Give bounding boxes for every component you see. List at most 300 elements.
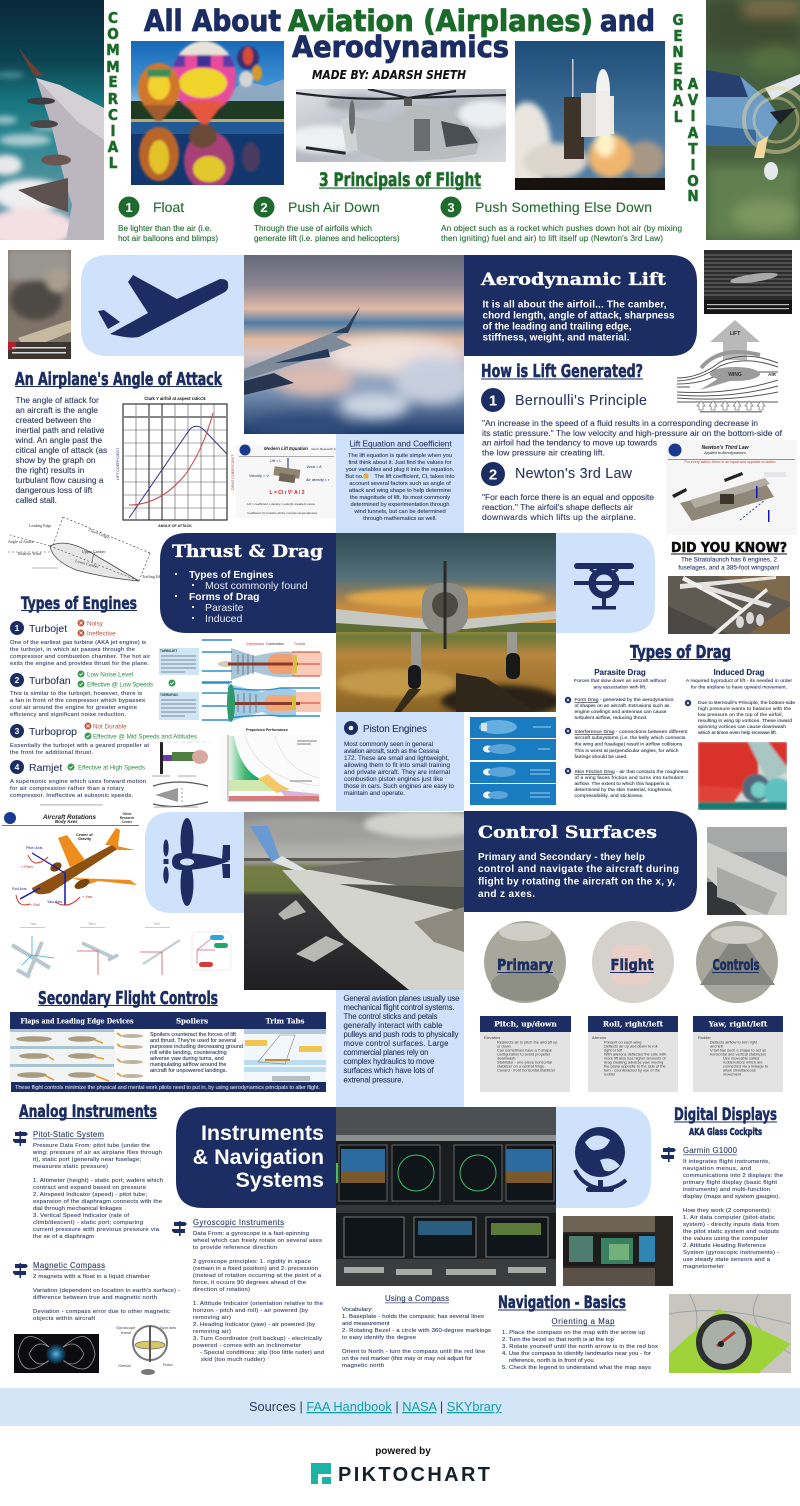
card: roll: With ailerons deflected the side with [604, 1052, 666, 1056]
card: roll: Roll, right/left [603, 1020, 664, 1028]
title [144, 4, 655, 64]
icon: airplane [98, 275, 228, 338]
principle 1: float: Be lighter than the air (i.e. [118, 224, 212, 233]
card: yaw: connected via a linkage to [723, 1064, 768, 1068]
sources bar [0, 1388, 800, 1426]
diagram: yaw pitch roll axes: Roll [154, 922, 160, 926]
panel body text: Primary and Secondary - they help [478, 852, 645, 863]
engine: turboprop [10, 722, 197, 756]
panel body text: through mathematics as well. [363, 516, 437, 522]
chart: lift and drag vs angle of attack: LIFT COEFFICIENT [116, 447, 120, 480]
panel body text: aviation aircraft, such as the Cessna [344, 748, 439, 755]
section: gyroscopic instruments: - Special conditions: slip (too little ruder) and [200, 1350, 324, 1356]
diagram: modern lift equation: Velocity = V [249, 474, 269, 478]
footer: powered by piktochart: PIKTOCHART [338, 1464, 490, 1486]
text: spoilers: Spoilers counteract the forces of lift [150, 1032, 236, 1038]
panel: instruments and navigation systems [176, 1107, 336, 1208]
text: spoilers: adverse yaw during turns, and [150, 1056, 224, 1062]
diagram: aircraft rotations: Body Axes [55, 819, 78, 824]
section: pitot-static system: contract and expand based on pressure [33, 1185, 147, 1191]
diagram: newton's third law applied to aerodynamics: Applied to Aerodynamics [703, 451, 746, 455]
table: secondary flight controls: Spoilers [176, 1016, 208, 1026]
footer: powered by piktochart [311, 1446, 490, 1486]
text: spoilers: and thrust. They're used for several [150, 1038, 236, 1044]
vertical label: commercial: E [108, 73, 118, 91]
section: garmin g1000: Garmin G1000 [683, 1146, 738, 1155]
column: parasite drag: of a wing faces friction and turns into turbulent [574, 775, 684, 781]
byline: MADE BY: ADARSH SHETH [312, 67, 466, 82]
section: pitot-static system: 2. Airspeed Indicator (speed) - pitot tube; [33, 1192, 147, 1198]
diagram: aircraft rotations: + Yaw [82, 895, 93, 899]
diagram: gyroscope: Gyroscope [116, 1325, 136, 1330]
engine: turbojet: exits the engine and provides thrust for the plane. [10, 661, 149, 667]
section: garmin g1000: communications into 2 displays: the [683, 1173, 784, 1179]
vertical label: commercial: M [106, 41, 120, 59]
column: induced drag: resulting in wing tip vortices. These inward [698, 718, 792, 724]
column: induced drag: Induced Drag [713, 668, 765, 677]
panel heading: & Navigation [193, 1145, 324, 1169]
diagram: modern lift equation: Lift = L [270, 459, 282, 463]
section: gyroscopic instruments: 2 gyroscope principles: 1. rigidity in space [193, 1259, 312, 1265]
control: primary: Primary [497, 956, 553, 974]
section: garmin g1000: System (gyroscopic instruments) - [683, 1250, 779, 1256]
vertical label: general aviation [672, 11, 699, 205]
diagram: newton's third law applied to aerodynamics: For every action, there is an equal and opposite re-action [685, 460, 775, 464]
photo: propeller plane on the tarmac [336, 533, 556, 712]
engine: turbojet [10, 620, 150, 667]
vertical label: commercial: I [110, 122, 116, 140]
engine: ramjet: for air compression rather than a rotary [10, 786, 124, 792]
section: using a compass: 2. Rotating Bezel - a circle with 360-degree markings [342, 1328, 491, 1334]
diagram: turbojet: TURBOJET [160, 649, 177, 653]
engine: turboprop: 3 [15, 726, 20, 736]
photo: space shuttle launch [515, 41, 665, 190]
section: bernoulli's principle: 1 [489, 392, 497, 410]
icon: signpost [13, 1131, 28, 1146]
engine: turbofan: Effective @ Low Speeds [87, 682, 153, 688]
text: angle of attack explanation: wind. An angle past the [14, 435, 102, 445]
section: garmin g1000: 2. Attitude Heading Reference [683, 1243, 767, 1249]
vertical label: general aviation: T [688, 140, 698, 158]
text: spoilers: manipulating airflow around the [150, 1062, 226, 1068]
section: newton's 3rd law [481, 462, 654, 522]
engine: turbofan: 2 [15, 675, 20, 685]
diagram: turbojet: Combustion [266, 642, 284, 646]
chart: lift and drag vs angle of attack: Clark Y airfoil at aspect ratio=6 [144, 396, 206, 401]
section: using a compass: Using a Compass [385, 1294, 449, 1303]
column: parasite drag: compressibility, and stickiness. [574, 793, 644, 799]
section: orienting a map [502, 1317, 658, 1371]
section: gyroscopic instruments: to provide reference direction [193, 1245, 277, 1251]
heading: navigation basics: Navigation - Basics [498, 1293, 626, 1313]
principle 3: push something else down: then igniting) fuel and air) to lift itself up (Newton's 3rd Law) [441, 234, 663, 243]
text: angle of attack explanation: the right) results in [16, 465, 85, 475]
vertical label: general aviation: R [673, 76, 684, 94]
icon: plane front view [574, 563, 634, 610]
heading: digital displays [674, 1105, 777, 1138]
panel bullet list: Parasite [205, 602, 244, 614]
section: magnetic compass: objects within aircraft [33, 1316, 95, 1322]
diagram: trim tabs [244, 1029, 326, 1082]
column: parasite drag: turbulent airflow, reducing thrust. [574, 715, 648, 721]
control: controls: Controls [712, 956, 760, 974]
diagram: how a wing creates lift: LIFT [730, 331, 740, 337]
text: angle of attack explanation: dangerous loss of lift [16, 485, 93, 495]
card: yaw: horizontal and vertical stabilizers [710, 1052, 766, 1056]
section: magnetic compass [13, 1261, 180, 1322]
diagram: yaw pitch roll axes [12, 922, 231, 977]
panel: lift equation and coefficient [336, 434, 464, 533]
engine: turboprop: Turboprop [29, 726, 77, 738]
panel bullet list: Types of Engines [189, 570, 274, 581]
principle 1: float: hot air balloons and blimps) [118, 234, 218, 243]
section: gyroscopic instruments: horizon - pitch and roll) - air powered (by [193, 1308, 308, 1314]
card: yaw: Deflects airflow to turn right [710, 1040, 758, 1044]
card: yaw: Yaw, right/left [708, 1020, 768, 1028]
chart: lift and drag vs angle of attack [116, 396, 235, 528]
diagram: turbojet: Turbine [294, 642, 305, 646]
panel: globe icon [556, 1107, 651, 1208]
section: gyroscopic instruments: (remain in a fixed position) and 2. precession [193, 1266, 318, 1272]
card: yaw: ruddervators which are [723, 1060, 763, 1064]
icon: plane top view [163, 818, 230, 906]
panel body text: The lift equation is quite simple when you [348, 453, 452, 459]
diagram: gyroscope: Gimbal [118, 1363, 131, 1368]
icon: signpost [172, 1221, 187, 1236]
column: parasite drag: any association with lift. [594, 684, 646, 690]
panel heading: Instruments [201, 1121, 324, 1145]
section: gyroscopic instruments: Data From: a gyroscope is a fast-spinning [193, 1231, 309, 1237]
control: primary [484, 921, 566, 1003]
chart: propulsion performance [220, 728, 320, 801]
section: garmin g1000: 1. Air data computer (pitot-static [683, 1215, 775, 1221]
icon: piston engine [344, 721, 358, 735]
panel heading: Thrust & Drag [172, 542, 323, 562]
section: using a compass: magnetic north [342, 1363, 384, 1369]
vertical label: commercial: M [106, 58, 120, 76]
diagram: modern lift equation: L = Cl r V² A / 2 [270, 490, 305, 496]
section: magnetic compass: difference between true and magnetic north [33, 1295, 157, 1301]
section: bernoulli's principle: an airfoil had the tendancy to move up towards [482, 438, 657, 448]
panel: control surfaces [464, 811, 697, 912]
sources bar: Sources | FAA Handbook | NASA | SKYbrary [249, 1399, 502, 1414]
panel body text: It is all about the airfoil... The camber, [482, 300, 667, 310]
card: pitch: Can sometimes have a T-shape [497, 1048, 552, 1052]
panel: airplane icon [81, 255, 244, 356]
section: garmin g1000: the values using the computer [683, 1236, 768, 1242]
photo: wing close-up [8, 250, 71, 359]
column: parasite drag: Form Drag - generated by the aerodynamics [574, 697, 674, 703]
text: angle of attack explanation: called stall. [16, 495, 57, 505]
heading: did you know: DID YOU KNOW? [671, 541, 787, 556]
section: gyroscopic instruments: direction of rotation) [193, 1287, 250, 1293]
principle 1: float: Float [153, 199, 184, 215]
vertical label: general aviation: V [688, 91, 699, 109]
card: yaw: and left [710, 1044, 724, 1048]
section: garmin g1000: display (maps and system gauges). [683, 1194, 780, 1200]
panel body text: chord length, angle of attack, sharpness [482, 310, 675, 322]
vertical label: commercial [106, 9, 120, 172]
principle 2: push air down: Through the use of airfoils which [254, 224, 372, 233]
section: orienting a map: 5. Check the legend to understand what the map says [502, 1365, 651, 1371]
panel: plane top view icon [145, 812, 244, 913]
section: gyroscopic instruments: Gyroscopic Instruments [193, 1218, 284, 1227]
text: spoilers: roll while landing, counteracting [150, 1050, 227, 1056]
photo: airfoil in wind tunnel [704, 250, 792, 314]
engine: turboprop: Not Durable [93, 724, 127, 730]
panel body text: move control surfaces. Large [344, 1039, 448, 1048]
diagram: modern lift equation: Area = A [307, 465, 322, 469]
panel body text: commercial planes rely on [344, 1048, 428, 1057]
vertical label: general aviation: L [674, 108, 683, 126]
engine: turbofan: efficiency and significant noise reduction. [10, 712, 126, 718]
text: stratolaunch fact: fuselages, and a 385-foot wingspan! [678, 564, 780, 572]
section: using a compass [342, 1294, 491, 1369]
card: roll: Deflects air up and down to roll [604, 1044, 658, 1048]
diagram: aircraft rotations: Glenn [122, 812, 132, 816]
principle 3: push something else down: An object such as a rocket which pushes down hot air (by mixing [441, 224, 682, 233]
vertical label: general aviation: O [687, 172, 699, 190]
section: gyroscopic instruments: removing air) [193, 1315, 231, 1321]
section: garmin g1000: navigation menus, and [683, 1166, 751, 1172]
principle 2: push air down [254, 196, 400, 243]
section: gyroscopic instruments [172, 1218, 324, 1363]
column: parasite drag: Parasite Drag [594, 668, 646, 677]
column: parasite drag: fairings should be used. [574, 754, 628, 760]
section: pitot-static system: current pressure with previous pressure via [33, 1227, 160, 1233]
section: garmin g1000: How they work (2 components): [683, 1208, 771, 1214]
column: induced drag: A required byproduct of lift - its needed in order [686, 678, 792, 684]
card: pitch: Redirects air to pitch the aircraft up [497, 1040, 557, 1044]
section: orienting a map: reference, north is in front of you [509, 1358, 594, 1364]
section: gyroscopic instruments: skid (too much rudder) [201, 1357, 265, 1363]
engine: turbofan: Turbofan [29, 675, 71, 687]
vertical label: general aviation: A [688, 75, 699, 93]
card: roll: more lift also has higher amounts of [604, 1056, 667, 1060]
column: induced drag: Due to Bernoulli's Principle, the bottom-side [698, 700, 795, 706]
diagram: newton's third law applied to aerodynamics [666, 440, 797, 535]
engine: ramjet: Effective at High Speeds [78, 764, 145, 772]
card: roll: rudder [604, 1072, 616, 1076]
section: bernoulli's principle: the low pressure air creating lift. [482, 448, 605, 458]
vertical label: general aviation: E [673, 27, 683, 45]
heading: analog instruments: Analog Instruments [19, 1102, 157, 1122]
engine: ramjet: Ramjet [29, 762, 62, 774]
vertical label: general aviation: G [672, 11, 684, 29]
card: yaw: Use moveable called [723, 1056, 759, 1060]
icon: piktochart logo [311, 1463, 331, 1484]
section: garmin g1000: the pitot static system and outputs [683, 1229, 779, 1235]
panel bullet list: Forms of Drag [189, 592, 259, 603]
section: gyroscopic instruments: 2. Heading Indicator (yaw) - air powered (by [193, 1322, 315, 1328]
principle 3: push something else down: Push Something Else Down [475, 199, 652, 215]
column: induced drag: spinning vortices can cause downwash [698, 724, 786, 730]
card: roll: drag creating adverse yaw moving [604, 1060, 663, 1064]
diagram: streamlined flow shapes [470, 717, 556, 805]
section: gyroscopic instruments: 1. Attitude Indicator (orientation relative to the [193, 1301, 324, 1307]
section: gyroscopic instruments: force, it occurs 90 degrees ahead of the [193, 1280, 307, 1286]
diagram: airfoil anatomy: Lower Camber [75, 558, 100, 569]
card: pitch: Canard - front horizontal stabilizer [497, 1068, 556, 1072]
section: pitot-static system: 3. Vertical Speed Indicator (rate of [33, 1213, 129, 1219]
section: magnetic compass: Deviation - compass error due to other magnetic [33, 1309, 170, 1315]
icon: globe [575, 1127, 626, 1192]
section: pitot-static system [13, 1130, 163, 1240]
section: magnetic compass: 2 magnets with a float in a liquid chamber [33, 1274, 150, 1280]
vertical label: general aviation: A [673, 92, 684, 110]
engine: turbojet: Ineffective [87, 630, 116, 638]
panel: aerodynamic lift [464, 255, 697, 356]
panel body text: extrenal pressure. [344, 1076, 404, 1084]
heading: digital displays: AKA Glass Cockpits [689, 1127, 762, 1138]
column: parasite drag: airflow. The extent to which this happens is [574, 781, 670, 787]
panel body text: pulleys and push rods to physically [344, 1030, 459, 1039]
text: angle of attack explanation: show by the graph on [16, 455, 96, 465]
panel body text: maintain and operate. [344, 790, 405, 797]
diagram: aircraft rotations: Center of [76, 833, 93, 837]
card: pitch: Elevators [484, 1035, 500, 1040]
text: angle of attack explanation: an aircraft is the angle [16, 405, 98, 415]
diagram: gyroscope [116, 1325, 176, 1375]
section: magnetic compass: Variation (dependent on location in earth's surface) - [33, 1288, 180, 1294]
photo: compass on a map [669, 1294, 791, 1373]
engine: ramjet: A supersonic engine which uses forward motion [10, 779, 146, 785]
diagram: aircraft rotations: Roll Axis [12, 887, 27, 891]
photo: glass cockpit [563, 1216, 673, 1286]
card: pitch: or down [497, 1044, 511, 1048]
panel body text: General aviation planes usually use [344, 994, 460, 1003]
section: garmin g1000: magnetometer [683, 1264, 724, 1270]
title: and [600, 4, 655, 38]
section: newton's 3rd law: "For each force there is an equal and opposite [482, 492, 654, 502]
diagram: airfoil anatomy: Trailing Edge [142, 574, 164, 579]
engine: turbojet: Noisy [87, 620, 104, 628]
section: pitot-static system: wing; pressure of air as airplane flies through [32, 1150, 162, 1156]
section: orienting a map: 1. Place the compass on the map with the arrow up [502, 1330, 646, 1336]
engine: turbojet: 1 [15, 623, 20, 633]
diagram: turbofan [159, 683, 321, 722]
diagram: ramjet [40, 776, 208, 807]
icon: signpost [13, 1263, 28, 1278]
title: Aviation (Airplanes) [288, 4, 593, 38]
diagram: modern lift equation: Modern Lift Equation [264, 446, 308, 451]
diagram: yaw pitch roll axes: Yaw [30, 922, 37, 926]
vertical label: commercial: O [107, 25, 119, 43]
panel body text: flight by rotating the aircraft on the x, y, [478, 876, 675, 888]
engine: turboprop: Essentially the turbojet with a geared propeller at [10, 743, 149, 749]
diagram: modern lift equation [236, 444, 343, 518]
panel body text: mechanical flight control systems. [344, 1003, 454, 1012]
card: pitch: downwash [497, 1056, 515, 1060]
section: pitot-static system: the se of a diaphragm [33, 1234, 94, 1240]
panel body text: account several factors such as angle of [349, 481, 451, 487]
engine: turbojet: One of the earliest gas turbine (AKA jet engine) is [10, 640, 146, 646]
footer: powered by piktochart: powered by [375, 1446, 431, 1457]
panel bullet list: Most commonly found [205, 580, 308, 592]
panel heading: Lift Equation and Coefficient [349, 440, 452, 448]
column: parasite drag: This is worst at perpendicular angles, for which [574, 748, 679, 754]
section: using a compass: and measurement [342, 1321, 390, 1327]
section: newton's 3rd law: reaction." The airfoil's shape deflects air [482, 502, 633, 512]
diagram: aircraft rotations: Gravity [78, 837, 92, 841]
card: yaw: Rudder [698, 1035, 711, 1040]
diagram: gyroscope: Rotor [163, 1362, 173, 1367]
diagram: airfoil anatomy: Chord Length [88, 527, 110, 540]
section: pitot-static system: Pressure Data From: pitot tube (under the [33, 1143, 151, 1149]
card: pitch: configuration to avoid propeller [497, 1052, 551, 1056]
column: parasite drag [565, 668, 689, 799]
panel body text: those in cars. Such engines are easy to [344, 783, 454, 790]
panel: thrust and drag [160, 533, 336, 633]
column: induced drag [685, 668, 795, 736]
panel body text: Most commonly seen in general [344, 741, 433, 748]
section: pitot-static system: 1. Altimeter (height) - static port; wafers which [33, 1178, 163, 1184]
card: pitch [480, 1016, 571, 1092]
photo: stratolaunch aircraft [668, 576, 790, 634]
principle 2: push air down: 2 [260, 200, 268, 215]
engine: turbofan [10, 670, 176, 718]
card: yaw: movement [723, 1072, 742, 1076]
principle 3: push something else down: 3 [447, 200, 455, 215]
title: Aerodynamics [292, 30, 509, 64]
chart: lift and drag vs angle of attack: DRAG COEFFICIENT [231, 454, 235, 490]
section: pitot-static system: measures static pressure) [33, 1164, 108, 1170]
title: All About [144, 4, 281, 38]
section: newton's 3rd law: downwards which lifts up the airplane. [482, 512, 636, 522]
heading: types of engines: Types of Engines [21, 594, 137, 614]
table footer text: These flight controls minimize the physical and mental work pilots need to put in, by using aerodynamics principals to alter flight. [15, 1085, 320, 1091]
text: angle of attack explanation: citical angle of attack (as [16, 445, 107, 455]
text: stratolaunch fact: The Stratolaunch has 6 engines, 2 [681, 556, 777, 564]
card: yaw: V-tail has such a shape to act as [710, 1048, 766, 1052]
panel heading: Control Surfaces [478, 823, 657, 843]
heading: angle of attack: An Airplane's Angle of Attack [15, 369, 223, 390]
column: parasite drag: Interference Drag - connections between different [574, 729, 688, 735]
panel body text: of the leading and trailing edge, [482, 322, 632, 332]
vertical label: commercial: A [108, 138, 119, 156]
vertical label: commercial: C [108, 106, 118, 124]
section: garmin g1000: It integrates flight instruments, [683, 1159, 770, 1165]
diagram: how a wing creates lift: AIR [768, 372, 777, 377]
section: using a compass: on the red marker (this may or may not adjust for [342, 1356, 472, 1362]
column: induced drag: for the airplane to have upward movement. [691, 684, 787, 690]
engine: turbofan: cool air around the engine for greater engine [10, 705, 137, 711]
panel body text: The control sticks and petals [344, 1012, 438, 1021]
section: newton's 3rd law: Newton's 3rd Law [515, 466, 633, 482]
section: garmin g1000: use steady state sensors and a [683, 1257, 771, 1263]
panel body text: control and navigate the aircraft during [478, 864, 679, 875]
card: roll: turn - counteracted by use of the [604, 1068, 660, 1072]
control: flight [592, 921, 674, 1003]
section: using a compass: Vocabulary: [342, 1307, 373, 1313]
column: parasite drag: determined by the skin material, roughness, [574, 787, 672, 793]
photo: helicopter [296, 89, 506, 162]
engine: turbojet: compressor and combustion chamber. The hot air [10, 654, 150, 660]
column: induced drag: high pressure wants to balance with the [698, 706, 791, 712]
photo: earth magnetic field [14, 1334, 99, 1373]
diagram: aircraft rotations: Aircraft Rotations [42, 814, 96, 821]
panel body text: first think about it. Just find the values for [348, 460, 452, 466]
heading: secondary flight controls: Secondary Flight Controls [38, 988, 218, 1009]
diagram: aircraft rotations: + Pitch [21, 865, 33, 869]
engine: ramjet: 4 [15, 762, 20, 772]
panel body text: determined by experimentation through [351, 502, 449, 508]
photo: airliner cockpit instrument panel [336, 1107, 556, 1286]
photo: general aviation plane [706, 0, 800, 240]
section: pitot-static system: Pitot-Static System [33, 1130, 104, 1139]
panel body text: your variables and plug it into the equation. [346, 467, 455, 473]
control: controls [696, 921, 778, 1003]
